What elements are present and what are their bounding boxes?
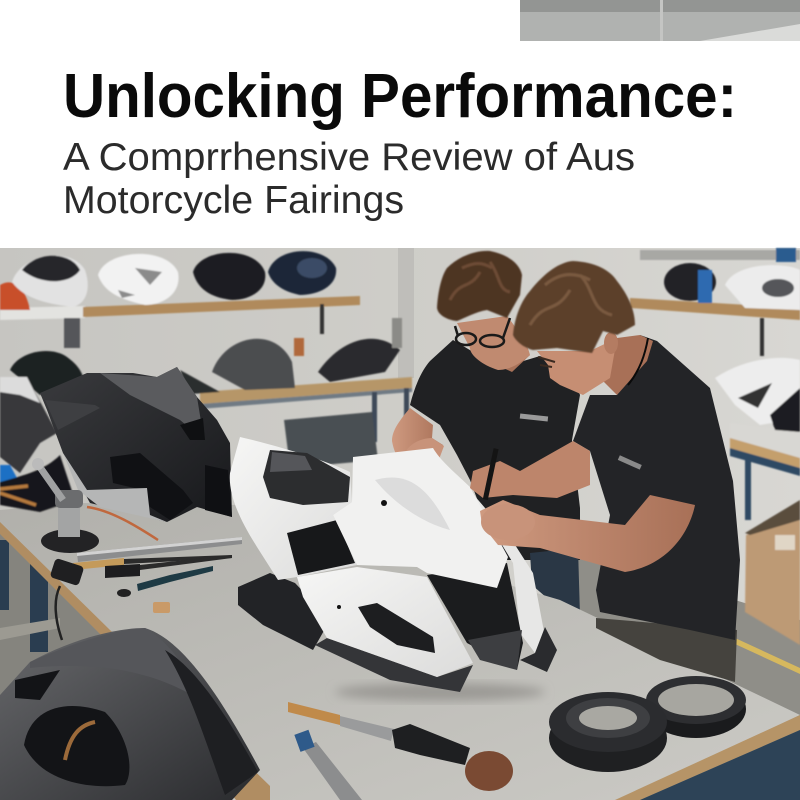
white title background — [0, 0, 800, 248]
rear cavity — [263, 450, 350, 505]
right shelf with helmets — [630, 248, 800, 356]
splitter — [315, 638, 473, 692]
work table — [0, 503, 800, 800]
large ring stack — [549, 704, 667, 772]
eye and brow — [538, 357, 555, 367]
fairing black base — [238, 573, 330, 650]
arm — [392, 408, 443, 461]
table wood front edge left — [0, 522, 270, 800]
upper ring — [646, 680, 746, 738]
subtitle: A Comprrhensive Review of Aus — [63, 136, 635, 179]
face — [537, 338, 617, 395]
silver lower piece — [63, 453, 167, 522]
air intake — [358, 603, 435, 653]
right strip — [467, 487, 545, 653]
forearm across table — [480, 495, 695, 572]
left background gear — [0, 351, 84, 512]
white fairing on table — [230, 437, 557, 692]
black t-shirt — [410, 340, 580, 560]
table wood front edge right — [615, 715, 800, 800]
right bench with white fairing — [715, 358, 800, 520]
table legs left — [0, 540, 60, 652]
shirt logo — [520, 414, 548, 421]
right chin — [520, 627, 557, 672]
wall pillar — [398, 248, 414, 378]
hair — [513, 261, 635, 353]
neck — [470, 348, 530, 372]
trousers — [596, 618, 737, 682]
cardboard box — [745, 500, 800, 645]
lower cavity — [287, 520, 355, 575]
mount holes — [381, 500, 387, 506]
necklace — [628, 338, 648, 385]
hair — [437, 251, 522, 321]
neck — [603, 335, 653, 395]
grey fairing foreground — [0, 628, 260, 800]
gripping hand — [481, 504, 535, 540]
black fairing left — [40, 367, 232, 522]
shirt logo — [618, 455, 642, 470]
left shelves with helmets — [0, 251, 360, 348]
floor stripe — [735, 638, 800, 674]
black t-shirt — [573, 335, 740, 640]
lower white panel — [297, 567, 473, 677]
glasses — [455, 318, 510, 347]
middle shelf with fairings — [180, 318, 412, 468]
hand on fairing — [402, 438, 444, 468]
suspension tool — [288, 702, 513, 800]
title: Unlocking Performance: — [63, 62, 737, 131]
ear — [604, 332, 618, 354]
jeans — [530, 548, 580, 616]
tools on table — [50, 537, 242, 640]
dark space below table edge — [0, 530, 112, 720]
upper arm and pen hand — [470, 441, 590, 498]
top right photo strip — [520, 0, 800, 41]
headlight opening — [427, 563, 523, 670]
person in front — [470, 261, 740, 682]
workshop photo illustration — [0, 248, 800, 800]
subtitle: Motorcycle Fairings — [63, 179, 404, 222]
workshop wall — [0, 248, 800, 800]
main upper shell — [333, 448, 508, 588]
table frame — [640, 730, 800, 800]
rear white shell — [230, 437, 357, 580]
clamp stand — [32, 458, 158, 553]
workshop floor — [540, 540, 800, 800]
pen in hand — [483, 448, 499, 500]
person at back — [392, 251, 580, 616]
fairing intake — [110, 453, 193, 520]
shadow under white fairing — [335, 683, 545, 701]
black ring parts — [549, 676, 746, 772]
face — [457, 316, 530, 370]
